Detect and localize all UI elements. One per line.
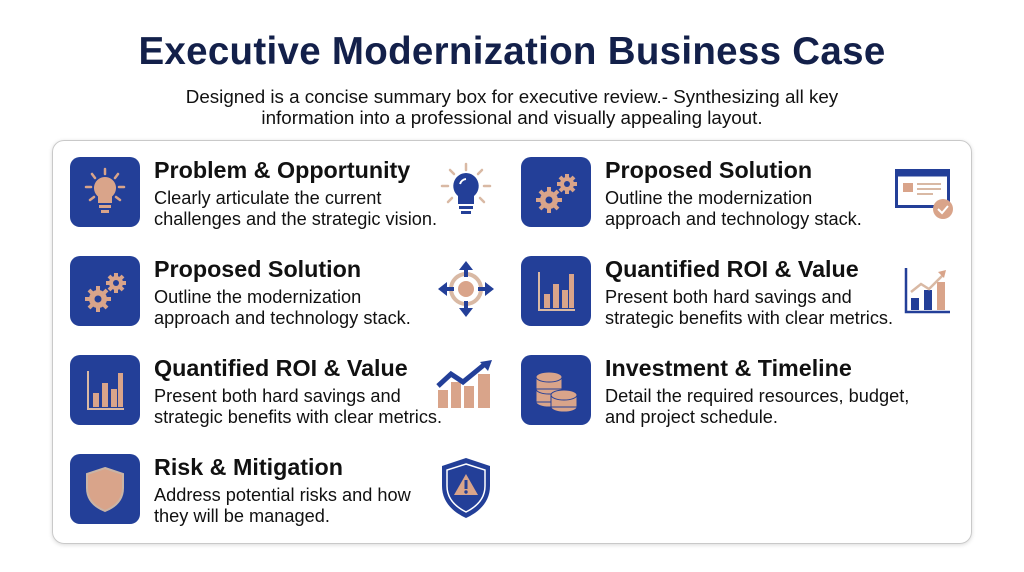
subtitle: information into a professional and visually appealing layout. bbox=[261, 107, 763, 128]
description bbox=[605, 287, 893, 328]
heading: Risk & Mitigation bbox=[154, 454, 343, 480]
item: ROI right bbox=[521, 256, 950, 328]
icon: gears box bbox=[70, 256, 140, 326]
description: challenges and the strategic vision. bbox=[154, 209, 437, 229]
icon: growth chart bbox=[436, 360, 492, 408]
description bbox=[154, 287, 411, 328]
description: strategic benefits with clear metrics. bbox=[605, 308, 893, 328]
description: Clearly articulate the current bbox=[154, 188, 381, 208]
description bbox=[154, 188, 437, 229]
icon: lightbulb bbox=[440, 162, 492, 214]
description: Present both hard savings and bbox=[154, 386, 401, 406]
heading: Proposed Solution bbox=[154, 256, 361, 282]
subtitle: Designed is a concise summary box for executive review.- Synthesizing all key bbox=[186, 86, 838, 107]
heading: Quantified ROI & Value bbox=[605, 256, 859, 282]
icon: lightbulb box bbox=[70, 157, 140, 227]
item: investment bbox=[521, 355, 909, 427]
title: Executive Modernization Business Case bbox=[138, 30, 886, 73]
description: they will be managed. bbox=[154, 506, 330, 526]
item: problem & opportunity bbox=[70, 157, 492, 229]
heading: Quantified ROI & Value bbox=[154, 355, 408, 381]
icon: coins box bbox=[521, 355, 591, 425]
icon: shield box bbox=[70, 454, 140, 524]
subtitle bbox=[186, 86, 838, 128]
description: approach and technology stack. bbox=[605, 209, 862, 229]
item: proposed solution left bbox=[70, 256, 494, 328]
heading: Investment & Timeline bbox=[605, 355, 852, 381]
description: Detail the required resources, budget, bbox=[605, 386, 909, 406]
description bbox=[154, 485, 411, 526]
icon: target arrows bbox=[438, 261, 494, 317]
description: Outline the modernization bbox=[605, 188, 812, 208]
description: and project schedule. bbox=[605, 407, 778, 427]
description bbox=[605, 386, 909, 427]
item: risk bbox=[70, 454, 490, 526]
description: approach and technology stack. bbox=[154, 308, 411, 328]
icon: bar chart box bbox=[521, 256, 591, 326]
description bbox=[154, 386, 442, 427]
icon: chart with arrow bbox=[904, 268, 950, 314]
description: Outline the modernization bbox=[154, 287, 361, 307]
heading: Proposed Solution bbox=[605, 157, 812, 183]
item: proposed solution right bbox=[521, 157, 953, 229]
icon: browser window with badge bbox=[895, 169, 953, 219]
item: ROI left bbox=[70, 355, 492, 427]
icon: bar chart box bbox=[70, 355, 140, 425]
description: strategic benefits with clear metrics. bbox=[154, 407, 442, 427]
description: Present both hard savings and bbox=[605, 287, 852, 307]
heading: Problem & Opportunity bbox=[154, 157, 410, 183]
description bbox=[605, 188, 862, 229]
icon: warning shield bbox=[442, 458, 490, 518]
icon: gears box bbox=[521, 157, 591, 227]
description: Address potential risks and how bbox=[154, 485, 411, 505]
panel: card bbox=[52, 140, 972, 544]
